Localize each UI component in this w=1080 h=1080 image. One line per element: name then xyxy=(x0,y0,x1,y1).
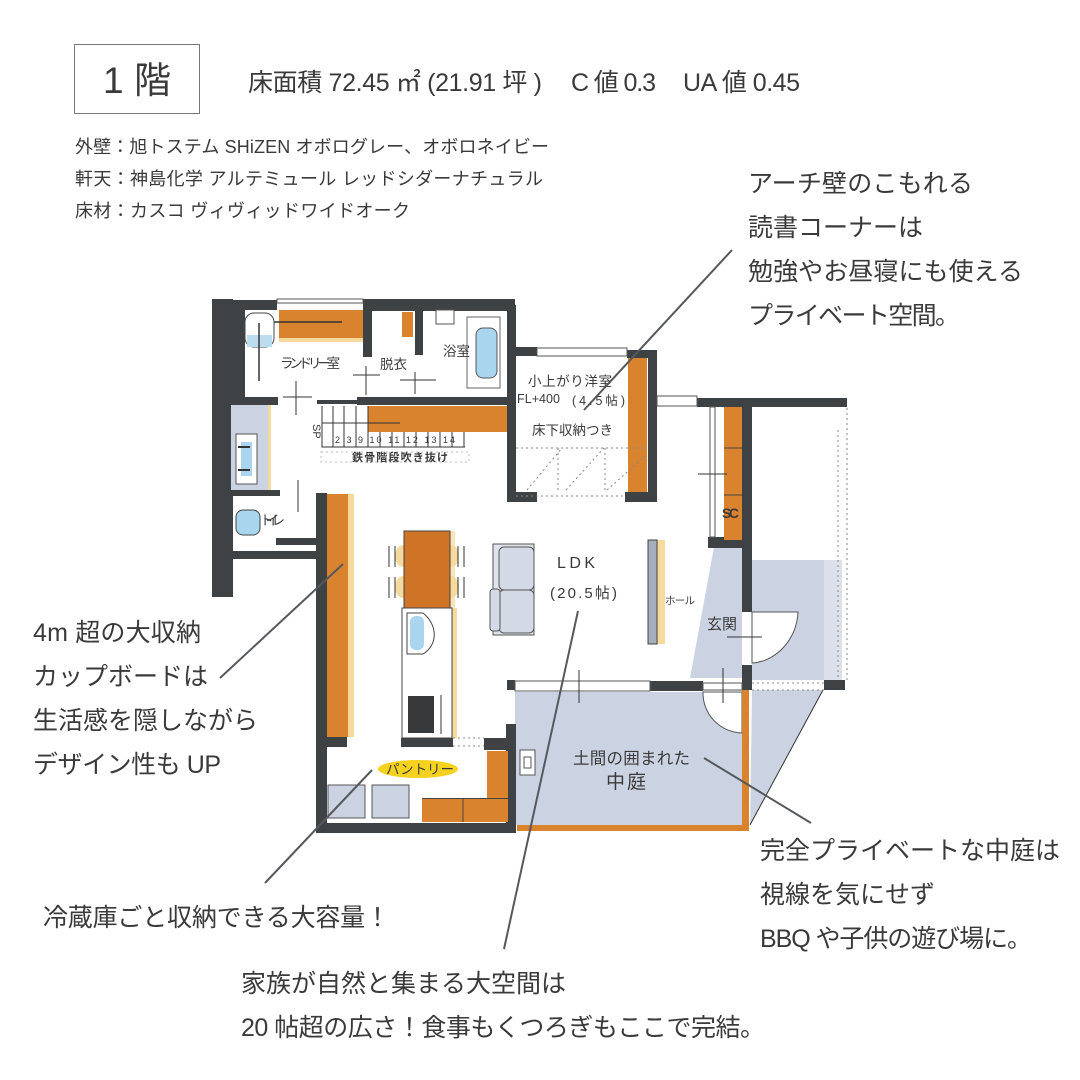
material notes: 外壁：旭トステム SHiZEN オボログレー、オボロネイビー xyxy=(75,137,549,157)
outlet box xyxy=(520,750,535,775)
leader line: LDK xyxy=(504,611,578,949)
material notes: 床材：カスコ ヴィヴィッドワイドオーク xyxy=(75,201,410,221)
callout: reading nook: プライベート空間。 xyxy=(748,302,960,330)
floor specs line: 床面積 72.45 ㎡ (21.91 坪 ) xyxy=(248,69,542,97)
pantry label: パントリー xyxy=(386,762,454,777)
staircase: SP xyxy=(310,424,322,439)
leader line: reading nook xyxy=(584,250,732,410)
callout: courtyard: 完全プライベートな中庭は xyxy=(760,837,1060,865)
courtyard and entry floors xyxy=(515,547,842,831)
floor specs line: UA 値 0.45 xyxy=(683,69,800,97)
walls xyxy=(212,299,847,833)
windows xyxy=(277,299,742,691)
material notes xyxy=(75,137,549,221)
handwritten room labels: 中庭 xyxy=(606,771,646,793)
handwritten room labels: 浴室 xyxy=(443,344,470,359)
leader line: courtyard xyxy=(704,758,811,823)
handwritten room labels: LDK xyxy=(557,555,595,572)
laundry room and bath fixtures xyxy=(245,310,500,415)
vanity xyxy=(231,405,268,490)
tv board in hall xyxy=(648,540,665,644)
callout: reading nook xyxy=(748,170,1023,330)
handwritten room labels: 玄関 xyxy=(707,616,737,633)
leader line: pantry xyxy=(265,770,372,883)
orange built-in storage xyxy=(262,310,742,822)
handwritten room labels: FL+400 xyxy=(517,392,560,406)
callout: pantry: 冷蔵庫ごと収納できる大容量！ xyxy=(43,904,390,932)
callout: cupboard: 生活感を隠しながら xyxy=(33,707,258,735)
handwritten room labels: 小上がり洋室 xyxy=(528,374,612,389)
callout: courtyard: 視線を気にせず xyxy=(760,881,935,909)
handwritten room labels xyxy=(260,344,739,793)
door swing arrows xyxy=(579,474,762,703)
callout: LDK: 家族が自然と集まる大空間は xyxy=(241,970,566,998)
staircase xyxy=(310,406,469,464)
callout: LDK xyxy=(241,970,765,1042)
handwritten room labels: トイレ xyxy=(260,513,285,528)
handwritten room labels: 土間の囲まれた xyxy=(573,749,690,768)
staircase: 2 3 9 10 11 12 13 14 xyxy=(335,435,455,445)
toilet xyxy=(236,480,298,535)
title box: 1階 xyxy=(74,44,200,114)
floor plan xyxy=(212,299,847,833)
dining table and chairs xyxy=(389,531,464,608)
handwritten room labels: ホール xyxy=(665,595,695,607)
title box: 1階: 1 階 xyxy=(103,60,171,101)
callout: courtyard xyxy=(760,837,1060,953)
callout: courtyard: BBQ や子供の遊び場に。 xyxy=(760,925,1032,953)
material notes: 軒天：神島化学 アルテミュール レッドシダーナチュラル xyxy=(75,169,543,189)
callout: LDK: 20 帖超の広さ！食事もくつろぎもここで完結。 xyxy=(241,1014,765,1042)
handwritten room labels: (20.5帖) xyxy=(550,585,617,602)
handwritten room labels: (4.5帖) xyxy=(572,393,625,408)
refrigerator spaces xyxy=(328,785,409,818)
dashed outlines xyxy=(453,408,847,746)
callout: cupboard xyxy=(33,619,258,779)
handwritten room labels: 床下収納つき xyxy=(532,423,613,438)
floor specs line: C 値 0.3 xyxy=(571,69,656,97)
leader line: cupboard xyxy=(220,564,343,678)
floor specs line xyxy=(248,69,800,97)
callout: reading nook: 勉強やお昼寝にも使える xyxy=(748,258,1023,286)
callout: reading nook: 読書コーナーは xyxy=(748,214,923,242)
staircase: 鉄骨階段吹き抜け xyxy=(352,450,448,464)
handwritten room labels: SC xyxy=(722,505,739,521)
callout: cupboard: デザイン性も UP xyxy=(33,751,221,779)
kitchen island xyxy=(401,608,457,747)
callout: cupboard: カップボードは xyxy=(33,663,208,691)
handwritten room labels: ランドリー室 xyxy=(280,356,340,371)
sofa xyxy=(490,544,534,635)
callout: reading nook: アーチ壁のこもれる xyxy=(748,170,973,198)
handwritten room labels: 脱衣 xyxy=(380,357,408,372)
callout: cupboard: 4m 超の大収納 xyxy=(33,619,201,647)
